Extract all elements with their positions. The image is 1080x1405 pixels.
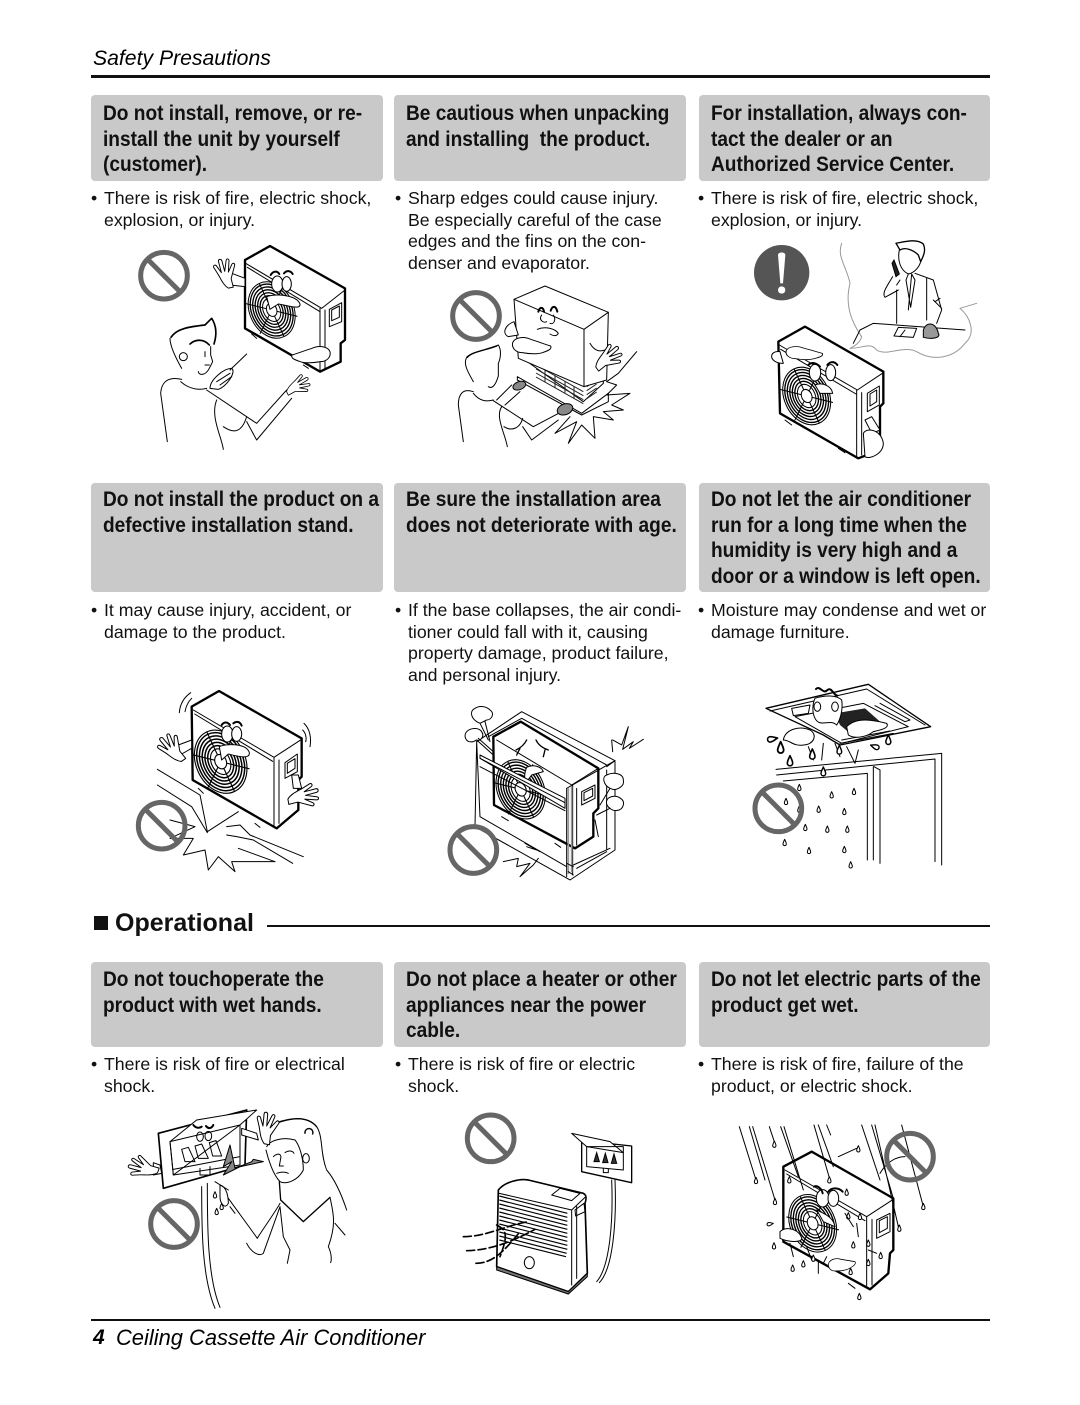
prohibition sign <box>151 1201 197 1247</box>
panel: humidity: door or a window is left open. <box>711 565 981 588</box>
right arm and hand <box>286 775 321 810</box>
text: fire or electrical shock: shock. <box>104 1076 155 1096</box>
text: • <box>91 600 97 620</box>
text: • <box>395 1054 401 1074</box>
text: • <box>91 188 97 208</box>
panel: wet hands <box>91 962 383 1047</box>
text: may cause injury: It may cause injury, accident, or <box>104 600 351 620</box>
outdoor unit <box>239 246 345 372</box>
text: • <box>91 1054 97 1074</box>
warning sign <box>754 245 809 300</box>
text: base collapses: tioner could fall with it, causing <box>408 622 648 642</box>
text: fire or electrical shock: There is risk of fire or electrical <box>104 1054 345 1074</box>
cable <box>597 1180 615 1283</box>
hands and drips <box>767 720 891 776</box>
text: base collapses: property damage, product failure, <box>408 643 669 663</box>
illustration: wet hands at switch box and woman <box>126 1110 347 1308</box>
panel: humidity: humidity is very high and a <box>711 539 957 562</box>
hands <box>780 1229 856 1273</box>
text: base collapses: and personal injury. <box>408 664 561 684</box>
illustration: man holding heavy unit <box>453 286 637 447</box>
panel: wet hands: product with wet hands. <box>103 994 322 1017</box>
panel: defective stand: defective installation stand. <box>103 514 354 537</box>
man on phone at desk <box>853 241 965 343</box>
text: sharp edges <box>395 188 662 272</box>
text: • <box>395 188 401 208</box>
cable <box>202 1183 220 1308</box>
section heading: Operational: Operational <box>115 909 254 937</box>
frame back <box>477 712 615 767</box>
text: • <box>698 188 704 208</box>
text: risk of fire 2: explosion, or injury. <box>711 210 862 230</box>
panel: defective stand <box>91 483 383 592</box>
text: moisture <box>698 600 986 642</box>
panel: installation area age: does not deteriorate with age. <box>406 514 677 537</box>
panel: heater near cable: appliances near the power <box>406 994 646 1017</box>
speech bubble <box>840 243 977 357</box>
footer: page number and product name: 4 <box>93 1326 105 1349</box>
prohibition sign <box>755 785 802 832</box>
shake marks <box>179 693 311 747</box>
base and vents <box>517 329 608 415</box>
text: • <box>698 1054 704 1074</box>
text: • <box>395 600 401 620</box>
woman <box>228 1119 347 1263</box>
panel: always contact dealer <box>699 95 990 181</box>
panel: defective stand: Do not install the product on a <box>103 488 379 511</box>
header: Safety Presautions: Safety Presautions <box>93 47 271 70</box>
text: moisture: Moisture may condense and wet or <box>711 600 986 620</box>
panel: wet hands: Do not touchoperate the <box>103 968 324 991</box>
panel: cautious when unpacking: Be cautious when unpacking <box>406 102 669 125</box>
box hands <box>126 1111 280 1183</box>
pointing and open hands <box>505 322 626 375</box>
outdoor unit <box>780 1152 893 1289</box>
outdoor unit <box>184 691 302 828</box>
panel: always contact dealer: Authorized Service Center. <box>711 153 954 176</box>
panel: electric parts wet: Do not let electric parts of the <box>711 968 981 991</box>
text: may cause injury: damage to the product. <box>104 622 286 642</box>
outdoor unit <box>487 722 598 848</box>
text: fire or electric shock <box>395 1054 635 1096</box>
text: • <box>698 600 704 620</box>
panel: humidity: Do not let the air conditioner <box>711 488 971 511</box>
prohibition sign <box>453 293 499 339</box>
smoke clouds <box>465 707 624 815</box>
rain streaks and drops <box>739 1125 925 1300</box>
electric spark <box>223 1145 263 1175</box>
text: risk of fire 1: There is risk of fire, electric shock, <box>104 188 371 208</box>
impact burst <box>555 352 637 443</box>
panel: installation area age: Be sure the installation area <box>406 488 661 511</box>
panel: cautious when unpacking <box>394 95 686 181</box>
panel: heater near cable: Do not place a heater or other <box>406 968 677 991</box>
panel: electric parts wet <box>699 962 990 1047</box>
panel: always contact dealer: tact the dealer or an <box>711 128 893 151</box>
text: risk of fire 1: explosion, or injury. <box>104 210 255 230</box>
illustration: cassette unit dripping over door <box>755 684 942 868</box>
section heading: Operational <box>94 909 990 937</box>
text: sharp edges: Be especially careful of the case <box>408 210 662 230</box>
illustration: man with screwdriver and outdoor unit <box>141 246 345 449</box>
text: sharp edges: denser and evaporator. <box>408 252 590 272</box>
panel: do not install yourself: Do not install, remove, or re- <box>103 102 362 125</box>
man <box>161 318 313 449</box>
left arm and hand <box>212 257 245 290</box>
panel: humidity <box>699 483 990 592</box>
prohibition sign <box>467 1115 514 1162</box>
footer: page number and product name: Ceiling Cassette Air Conditioner <box>116 1325 425 1350</box>
text: base collapses <box>395 600 681 684</box>
text: may cause injury <box>91 600 352 642</box>
illustration: office man on phone and pointing unit <box>754 241 977 458</box>
illustration: unit in rotten frame <box>450 707 643 880</box>
door frame <box>776 753 942 865</box>
text: risk of fire 2 <box>698 188 978 230</box>
panel: always contact dealer: For installation, always con- <box>711 102 967 125</box>
panel: cautious when unpacking: and installing the product. <box>406 128 650 151</box>
text: moisture: damage furniture. <box>711 622 850 642</box>
panel: do not install yourself: (customer). <box>103 153 207 176</box>
panel: electric parts wet: product get wet. <box>711 994 859 1017</box>
prohibition sign <box>141 252 187 299</box>
frame front <box>475 742 615 880</box>
outdoor unit <box>774 327 883 458</box>
panel: heater near cable <box>394 962 686 1047</box>
wet hand and drops <box>213 1182 235 1215</box>
crack marks <box>503 727 643 877</box>
man lifting <box>458 345 574 447</box>
text: fire or electric shock: shock. <box>408 1076 459 1096</box>
illustration: outdoor unit in the rain <box>739 1125 933 1300</box>
text: sharp edges: Sharp edges could cause injury. <box>408 188 658 208</box>
text: fire failure: There is risk of fire, failure of the <box>711 1054 964 1074</box>
panel: installation area age <box>394 483 686 592</box>
panel: do not install yourself: install the unit by yourself <box>103 128 340 151</box>
text: risk of fire 1 <box>91 188 371 230</box>
left arm and hand <box>154 730 192 768</box>
text: fire failure <box>698 1054 964 1096</box>
cassette panel <box>766 684 931 745</box>
footer: page number and product name <box>91 1319 990 1350</box>
prohibition sign <box>450 827 497 873</box>
text: fire failure: product, or electric shock. <box>711 1076 913 1096</box>
wall outlet <box>572 1133 632 1183</box>
heater <box>497 1180 587 1294</box>
illustration: heater beside wall outlet <box>463 1115 632 1294</box>
heat waves <box>463 1222 535 1263</box>
text: base collapses: If the base collapses, the air condi- <box>408 600 681 620</box>
text: sharp edges: edges and the fins on the con- <box>408 231 646 251</box>
switch box <box>158 1110 257 1188</box>
text: fire or electrical shock <box>91 1054 345 1096</box>
dripping face <box>813 688 842 725</box>
text: fire or electric shock: There is risk of fire or electric <box>408 1054 635 1074</box>
prohibition sign <box>887 1133 933 1180</box>
water drops <box>783 784 856 868</box>
panel: do not install yourself <box>91 95 383 181</box>
prohibition sign <box>138 802 185 849</box>
pointing hand <box>292 347 330 363</box>
panel: humidity: run for a long time when the <box>711 514 967 537</box>
unit body <box>514 286 608 387</box>
illustration: tilting unit on broken stand <box>138 691 321 872</box>
thumb hand <box>863 417 883 458</box>
text: risk of fire 2: There is risk of fire, electric shock, <box>711 188 978 208</box>
broken stand <box>157 769 303 872</box>
pointing hand <box>772 347 823 363</box>
panel: heater near cable: cable. <box>406 1019 460 1042</box>
